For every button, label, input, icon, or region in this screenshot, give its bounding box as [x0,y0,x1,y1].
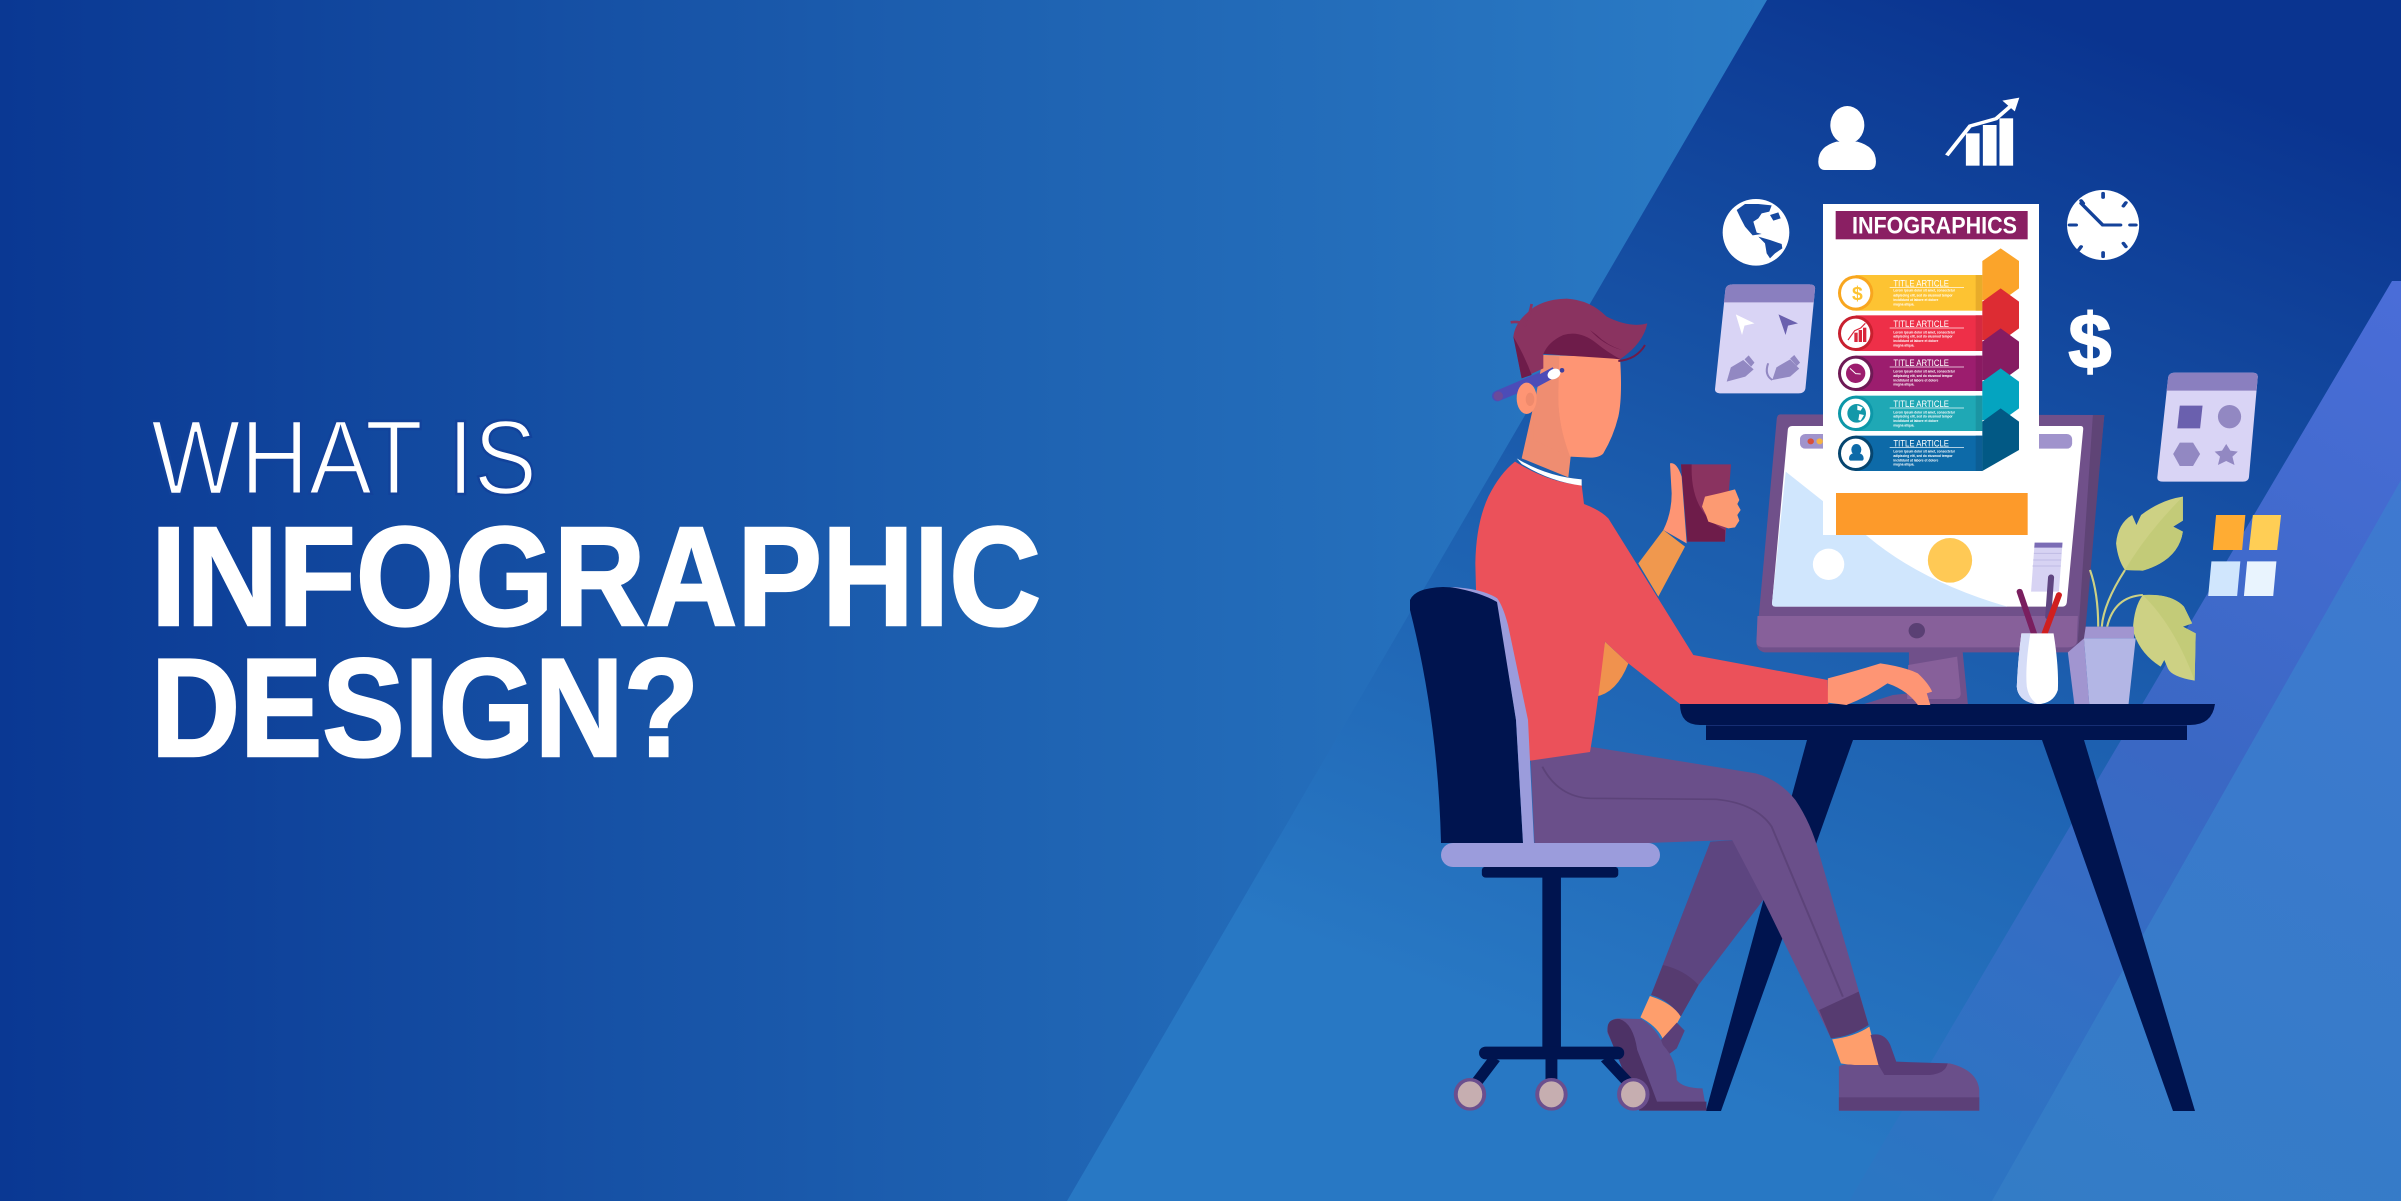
title line: what is: WHAT IS [151,399,537,517]
title line: design: DESIGN? [151,629,699,786]
chair back [1410,587,1523,843]
row 3 [1838,356,1982,391]
title [151,399,1041,786]
row 3: adipiscing elit, sed do eiusmod tempor [1893,373,1953,378]
ear [1517,383,1537,414]
row 4: magna aliqua. [1893,422,1914,427]
poster sheet [1823,204,2039,535]
pencils [2020,577,2059,633]
row 2: adipiscing elit, sed do eiusmod tempor [1893,334,1953,339]
monitor stand [1864,650,1968,704]
monitor frame [1756,414,2104,652]
poster heading: INFOGRAPHICS [1852,213,2017,239]
row 2: magna aliqua. [1893,342,1914,347]
pencil behind ear [1494,372,1555,401]
row 4: adipiscing elit, sed do eiusmod tempor [1893,414,1953,419]
back shoe [1607,1018,1706,1111]
background: second diagonal band [1992,480,2401,1201]
row 1 [1838,275,1982,311]
row 1: Lorem ipsum dolor sit amet, consectetur [1893,288,1955,293]
table legs [1706,740,2195,1111]
pencil cup [2017,633,2058,704]
row 5 [1838,436,1982,471]
row 1: incididunt ut labore et dolore [1893,297,1939,302]
far arm holding cup [1638,463,1741,597]
row 2: incididunt ut labore et dolore [1893,338,1939,343]
chair seat [1441,843,1660,867]
row 2 [1838,315,1982,351]
row 3: magna aliqua. [1893,382,1914,387]
head [1543,355,1621,458]
chair back edge [1450,587,1534,843]
title line: infographic: INFOGRAPHIC [151,497,1041,655]
person: legs [1456,747,1979,1111]
stacked hexagon arrows [1982,248,2019,471]
poster banner [1836,211,2028,239]
inner arm shade [1595,642,1628,697]
icon: globe [1723,199,1789,266]
row 5: incididunt ut labore et dolore [1893,457,1939,462]
plant stems [2090,570,2143,627]
plant and desk items [2017,497,2196,704]
monitor screen [1772,426,2083,607]
resting hand [1828,663,1932,705]
colour swatches [2208,515,2281,596]
row 4: Lorem ipsum dolor sit amet, consectetur [1893,409,1955,414]
head shade [1533,355,1570,457]
hair [1511,299,1647,378]
row 4: TITLE ARTICLE [1893,399,1949,409]
icon: person [1818,106,1876,170]
front leg [1530,747,1869,1038]
panel: cursor and pen tools [1715,284,1815,393]
sweater [1475,462,1828,761]
desk [1680,704,2215,740]
row 5: TITLE ARTICLE [1893,439,1949,449]
neck [1522,380,1571,477]
panel: shapes [2157,373,2258,482]
row 5: magna aliqua. [1893,462,1914,467]
background: lighter diagonal band [1849,281,2401,1201]
row 4 [1838,396,1982,431]
background: right diagonal panel [1067,0,2401,1201]
row 3: Lorem ipsum dolor sit amet, consectetur [1893,369,1955,374]
icon: growth chart [1947,98,2019,166]
chair [1410,587,1660,867]
plant leaf lower [2133,595,2196,681]
front ankle [1832,1027,1879,1066]
infographic poster [1823,204,2039,535]
pencil tip [1533,367,1564,383]
row 1: magna aliqua. [1893,302,1914,307]
row 1: $ [1852,284,1863,305]
row 2: TITLE ARTICLE [1893,319,1949,329]
row 1: adipiscing elit, sed do eiusmod tempor [1893,292,1953,297]
plant leaf upper [2116,497,2183,571]
icon: dollar sign: $ [2068,297,2112,385]
monitor [1756,414,2104,704]
row 3: TITLE ARTICLE [1893,358,1949,368]
floating icons [1715,98,2258,482]
row 1: TITLE ARTICLE [1893,279,1949,289]
row 2: Lorem ipsum dolor sit amet, consectetur [1893,329,1955,334]
back leg [1640,840,1766,1045]
row 4: incididunt ut labore et dolore [1893,418,1939,423]
plant pot [2068,627,2136,704]
collar [1517,458,1582,486]
front shoe [1839,1034,1979,1111]
row 3: incididunt ut labore et dolore [1893,377,1939,382]
icon: clock [2067,190,2139,260]
row 5: adipiscing elit, sed do eiusmod tempor [1893,453,1953,458]
row 5: Lorem ipsum dolor sit amet, consectetur [1893,449,1955,454]
poster orange bar [1836,493,2028,535]
casters and base [1456,867,1648,1109]
person: upper body [1475,299,1828,761]
